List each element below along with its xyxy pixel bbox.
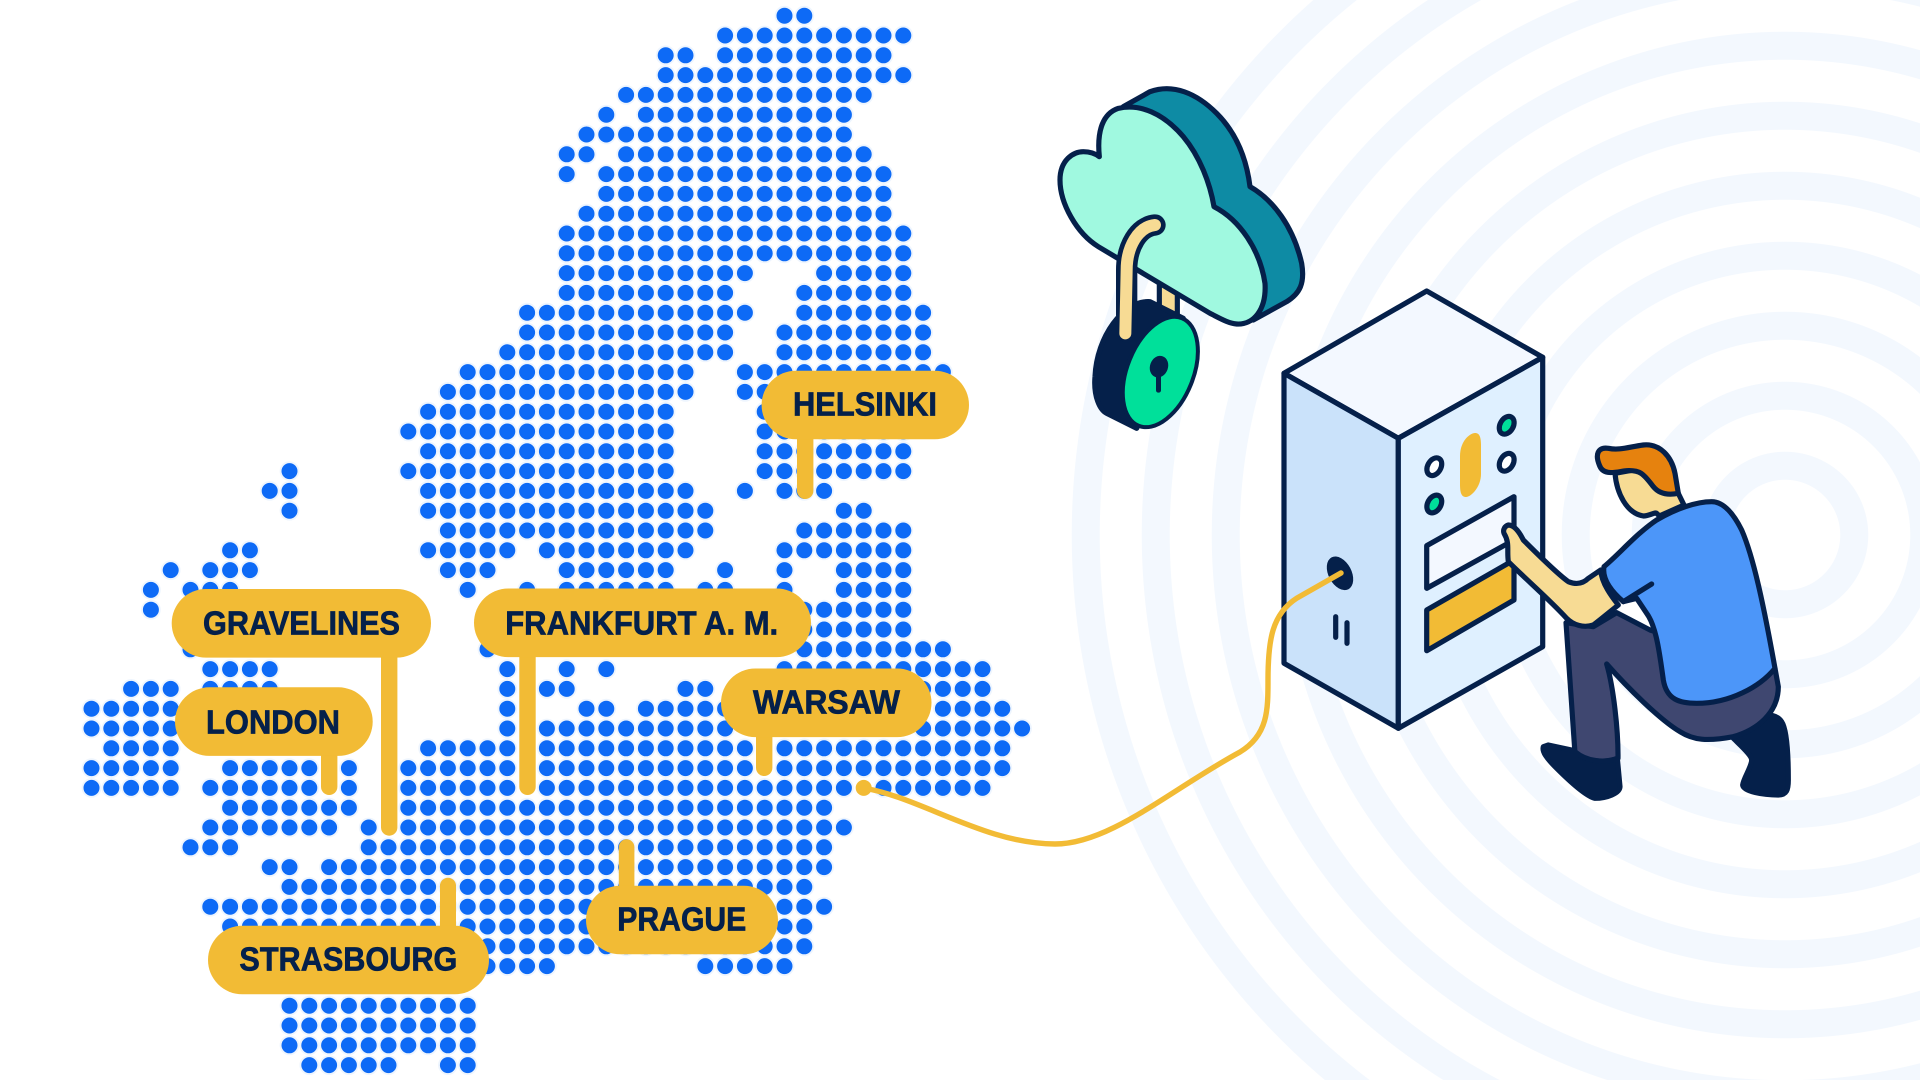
dot map of Europe: [92, 16, 1022, 1065]
indicator lights: [1424, 414, 1517, 516]
cloud face: [1060, 107, 1265, 324]
label: Strasbourg: [208, 878, 489, 994]
hair: [1597, 445, 1678, 494]
label: Prague: [586, 839, 778, 954]
server left side: [1284, 373, 1398, 728]
label: Strasbourg: STRASBOURG: [239, 941, 457, 978]
label: Prague: PRAGUE: [617, 901, 746, 938]
label: London: [175, 687, 373, 795]
illustration: technician: [1504, 445, 1788, 798]
arm and hand: [1504, 525, 1618, 626]
label: Helsinki: [762, 371, 969, 499]
label: Frankfurt a. M.: [474, 588, 811, 795]
label: Frankfurt a. M.: FRANKFURT A. M.: [505, 604, 778, 641]
padlock shackle: [1125, 225, 1155, 333]
padlock face: [1108, 306, 1213, 438]
label: Gravelines: [172, 589, 431, 836]
label: Helsinki: HELSINKI: [793, 386, 937, 423]
indicator pill: [1460, 433, 1481, 497]
shirt: [1604, 502, 1775, 703]
cable port: [1321, 552, 1359, 595]
icon: server cabinet: [1284, 291, 1543, 728]
label: London: LONDON: [206, 703, 340, 740]
drive slot white: [1427, 497, 1514, 588]
back boot: [1733, 715, 1788, 795]
server top: [1284, 291, 1543, 438]
server right side: [1398, 357, 1543, 728]
padlock body back: [1095, 302, 1183, 428]
label: Warsaw: [721, 668, 932, 776]
connector cable from map to server: [856, 573, 1341, 844]
drive slot yellow: [1427, 560, 1514, 651]
neck and face: [1615, 463, 1684, 516]
cloud depth: [1123, 89, 1303, 320]
front boot: [1543, 745, 1620, 798]
icon: cloud with padlock: [1060, 89, 1303, 438]
vents: [1336, 617, 1347, 643]
label: Warsaw: WARSAW: [753, 683, 901, 720]
sleeve fold: [1623, 584, 1652, 602]
label: Gravelines: GRAVELINES: [203, 604, 400, 641]
shackle rear stub: [1159, 280, 1177, 320]
trousers: [1566, 613, 1778, 761]
keyhole: [1147, 353, 1171, 393]
